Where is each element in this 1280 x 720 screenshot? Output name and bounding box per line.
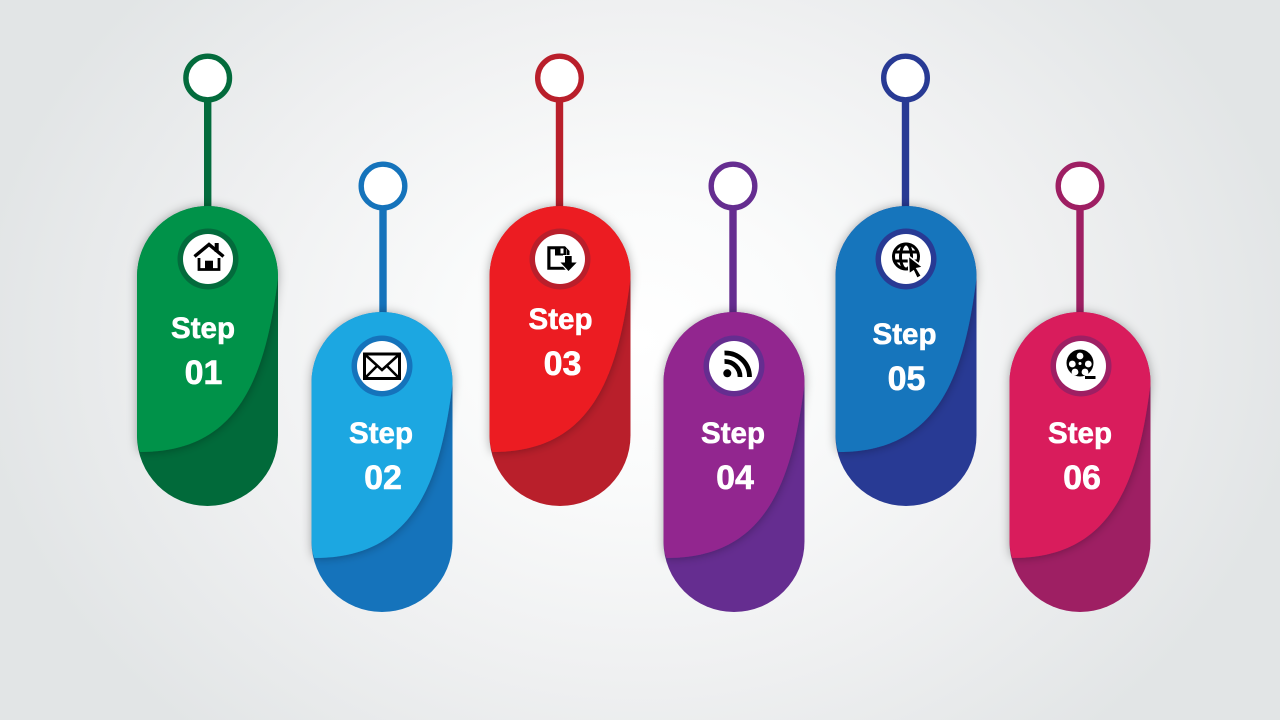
icon: save [530,228,590,290]
label: step 04: Step [701,417,765,450]
label: step 02: 02 [364,459,402,497]
label: step 06: 06 [1063,459,1101,497]
label: step 04: 04 [716,459,754,497]
icon: rss [704,336,764,396]
icon: envelope [352,336,412,396]
step 01 [137,56,278,506]
label: step 05 [873,318,936,398]
pill 03 [490,206,630,506]
label: step 01 [171,312,235,392]
connector pin 01 [186,56,230,208]
label: step 02: Step [349,417,413,450]
connector pin 03 [538,56,581,208]
connector pin 04 [711,164,755,316]
connector pin 02 [361,164,405,316]
icon: globe cursor [876,228,936,290]
icon: film reel [1050,336,1112,396]
icon: home [178,228,238,290]
pill 01 [137,206,278,506]
connector pin 06 [1058,164,1102,316]
label: step 02 [349,417,413,497]
label: step 03: 03 [544,345,581,383]
label: step 05: 05 [888,360,925,398]
connector pin 05 [884,56,927,208]
label: step 03 [529,303,592,383]
label: step 03: Step [529,303,592,336]
pill 02 [312,312,452,612]
pill 05 [836,206,976,506]
pill 04 [664,312,804,612]
step 03 [490,56,630,506]
label: step 01: 01 [185,354,222,392]
step 06 [1010,164,1150,612]
pill 06 [1010,312,1150,612]
label: step 04 [701,417,765,497]
label: step 05: Step [873,318,936,351]
label: step 06 [1048,417,1112,497]
step 04 [664,164,804,612]
label: step 06: Step [1048,417,1112,450]
step 02 [312,164,452,612]
label: step 01: Step [171,312,235,345]
step 05 [836,56,976,506]
